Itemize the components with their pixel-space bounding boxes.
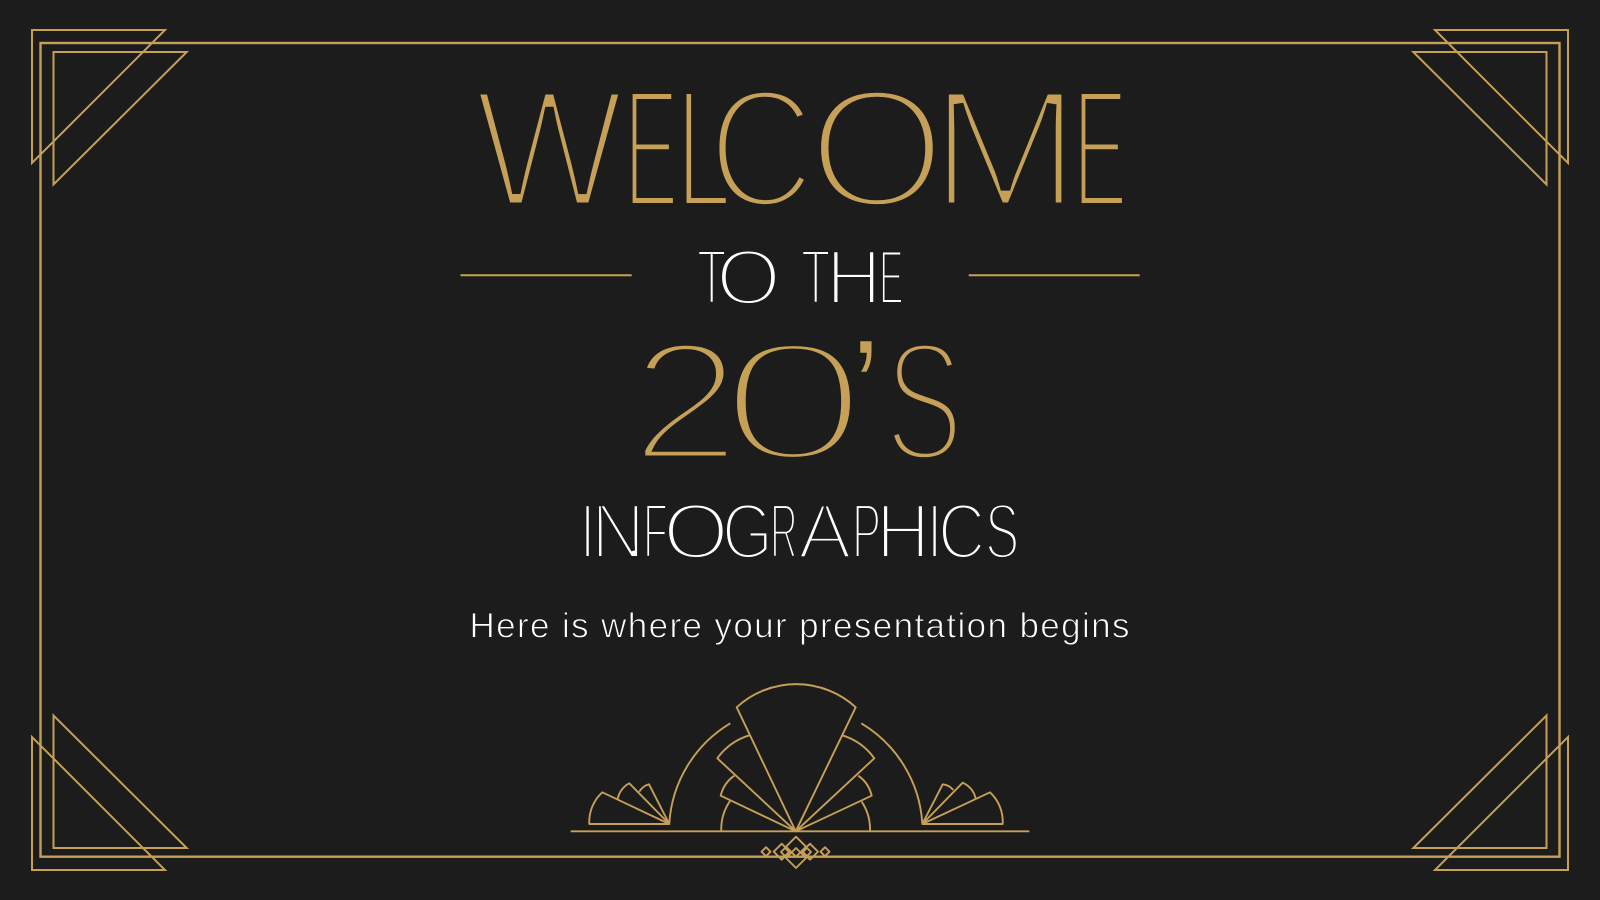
heading: INFOGRAPHICS: C bbox=[938, 487, 986, 575]
corner triangles: top right bbox=[1413, 30, 1568, 184]
ornament base line bbox=[571, 830, 1029, 832]
title: WELCOME bbox=[474, 54, 1127, 244]
heading: TO THE: H bbox=[826, 232, 881, 320]
diamond ornament bbox=[762, 837, 830, 868]
heading: TO THE: T bbox=[800, 232, 830, 320]
divider line right of TO THE bbox=[969, 274, 1140, 276]
heading: INFOGRAPHICS: R bbox=[770, 487, 798, 575]
heading: INFOGRAPHICS: F bbox=[643, 487, 668, 575]
heading: TO THE: E bbox=[879, 232, 904, 320]
heading: INFOGRAPHICS: I bbox=[580, 487, 595, 575]
art deco fan ornament bbox=[571, 684, 1029, 868]
title: WELCOME: E bbox=[624, 54, 679, 244]
title: 20'S bbox=[630, 307, 963, 497]
heading: INFOGRAPHICS: S bbox=[985, 487, 1020, 575]
right small fan bbox=[922, 783, 1003, 824]
title: 20'S: 2 bbox=[630, 307, 741, 497]
heading: INFOGRAPHICS bbox=[580, 487, 1020, 575]
heading: TO THE bbox=[696, 232, 904, 320]
left small fan bbox=[589, 783, 669, 824]
heading: INFOGRAPHICS: G bbox=[722, 487, 773, 575]
title: WELCOME: O bbox=[808, 54, 945, 244]
heading: TO THE: T bbox=[696, 232, 726, 320]
heading: INFOGRAPHICS: H bbox=[876, 487, 930, 575]
title: 20'S: 0 bbox=[719, 307, 868, 497]
title: WELCOME: M bbox=[929, 54, 1081, 244]
heading: INFOGRAPHICS: P bbox=[852, 487, 881, 575]
heading: INFOGRAPHICS: A bbox=[798, 487, 852, 575]
title: WELCOME: E bbox=[1073, 54, 1127, 244]
divider line left of TO THE bbox=[460, 274, 632, 276]
title: WELCOME: C bbox=[708, 54, 815, 244]
corner triangles: bottom left bbox=[32, 716, 187, 870]
title: 20'S: ’ bbox=[849, 307, 882, 475]
heading: INFOGRAPHICS: O bbox=[663, 487, 728, 575]
outer arcs bbox=[669, 723, 922, 823]
heading: TO THE: O bbox=[716, 232, 781, 320]
heading: INFOGRAPHICS: N bbox=[591, 487, 645, 575]
corner triangles: bottom right bbox=[1413, 716, 1568, 870]
corner triangles: top left bbox=[32, 30, 187, 184]
title: WELCOME: W bbox=[474, 54, 624, 244]
heading: INFOGRAPHICS: I bbox=[927, 487, 942, 575]
title: WELCOME: L bbox=[676, 54, 731, 244]
subtitle: Here is where your presentation begins bbox=[470, 606, 1130, 645]
title: 20'S: S bbox=[884, 307, 963, 497]
centre fan blades bbox=[717, 684, 874, 831]
